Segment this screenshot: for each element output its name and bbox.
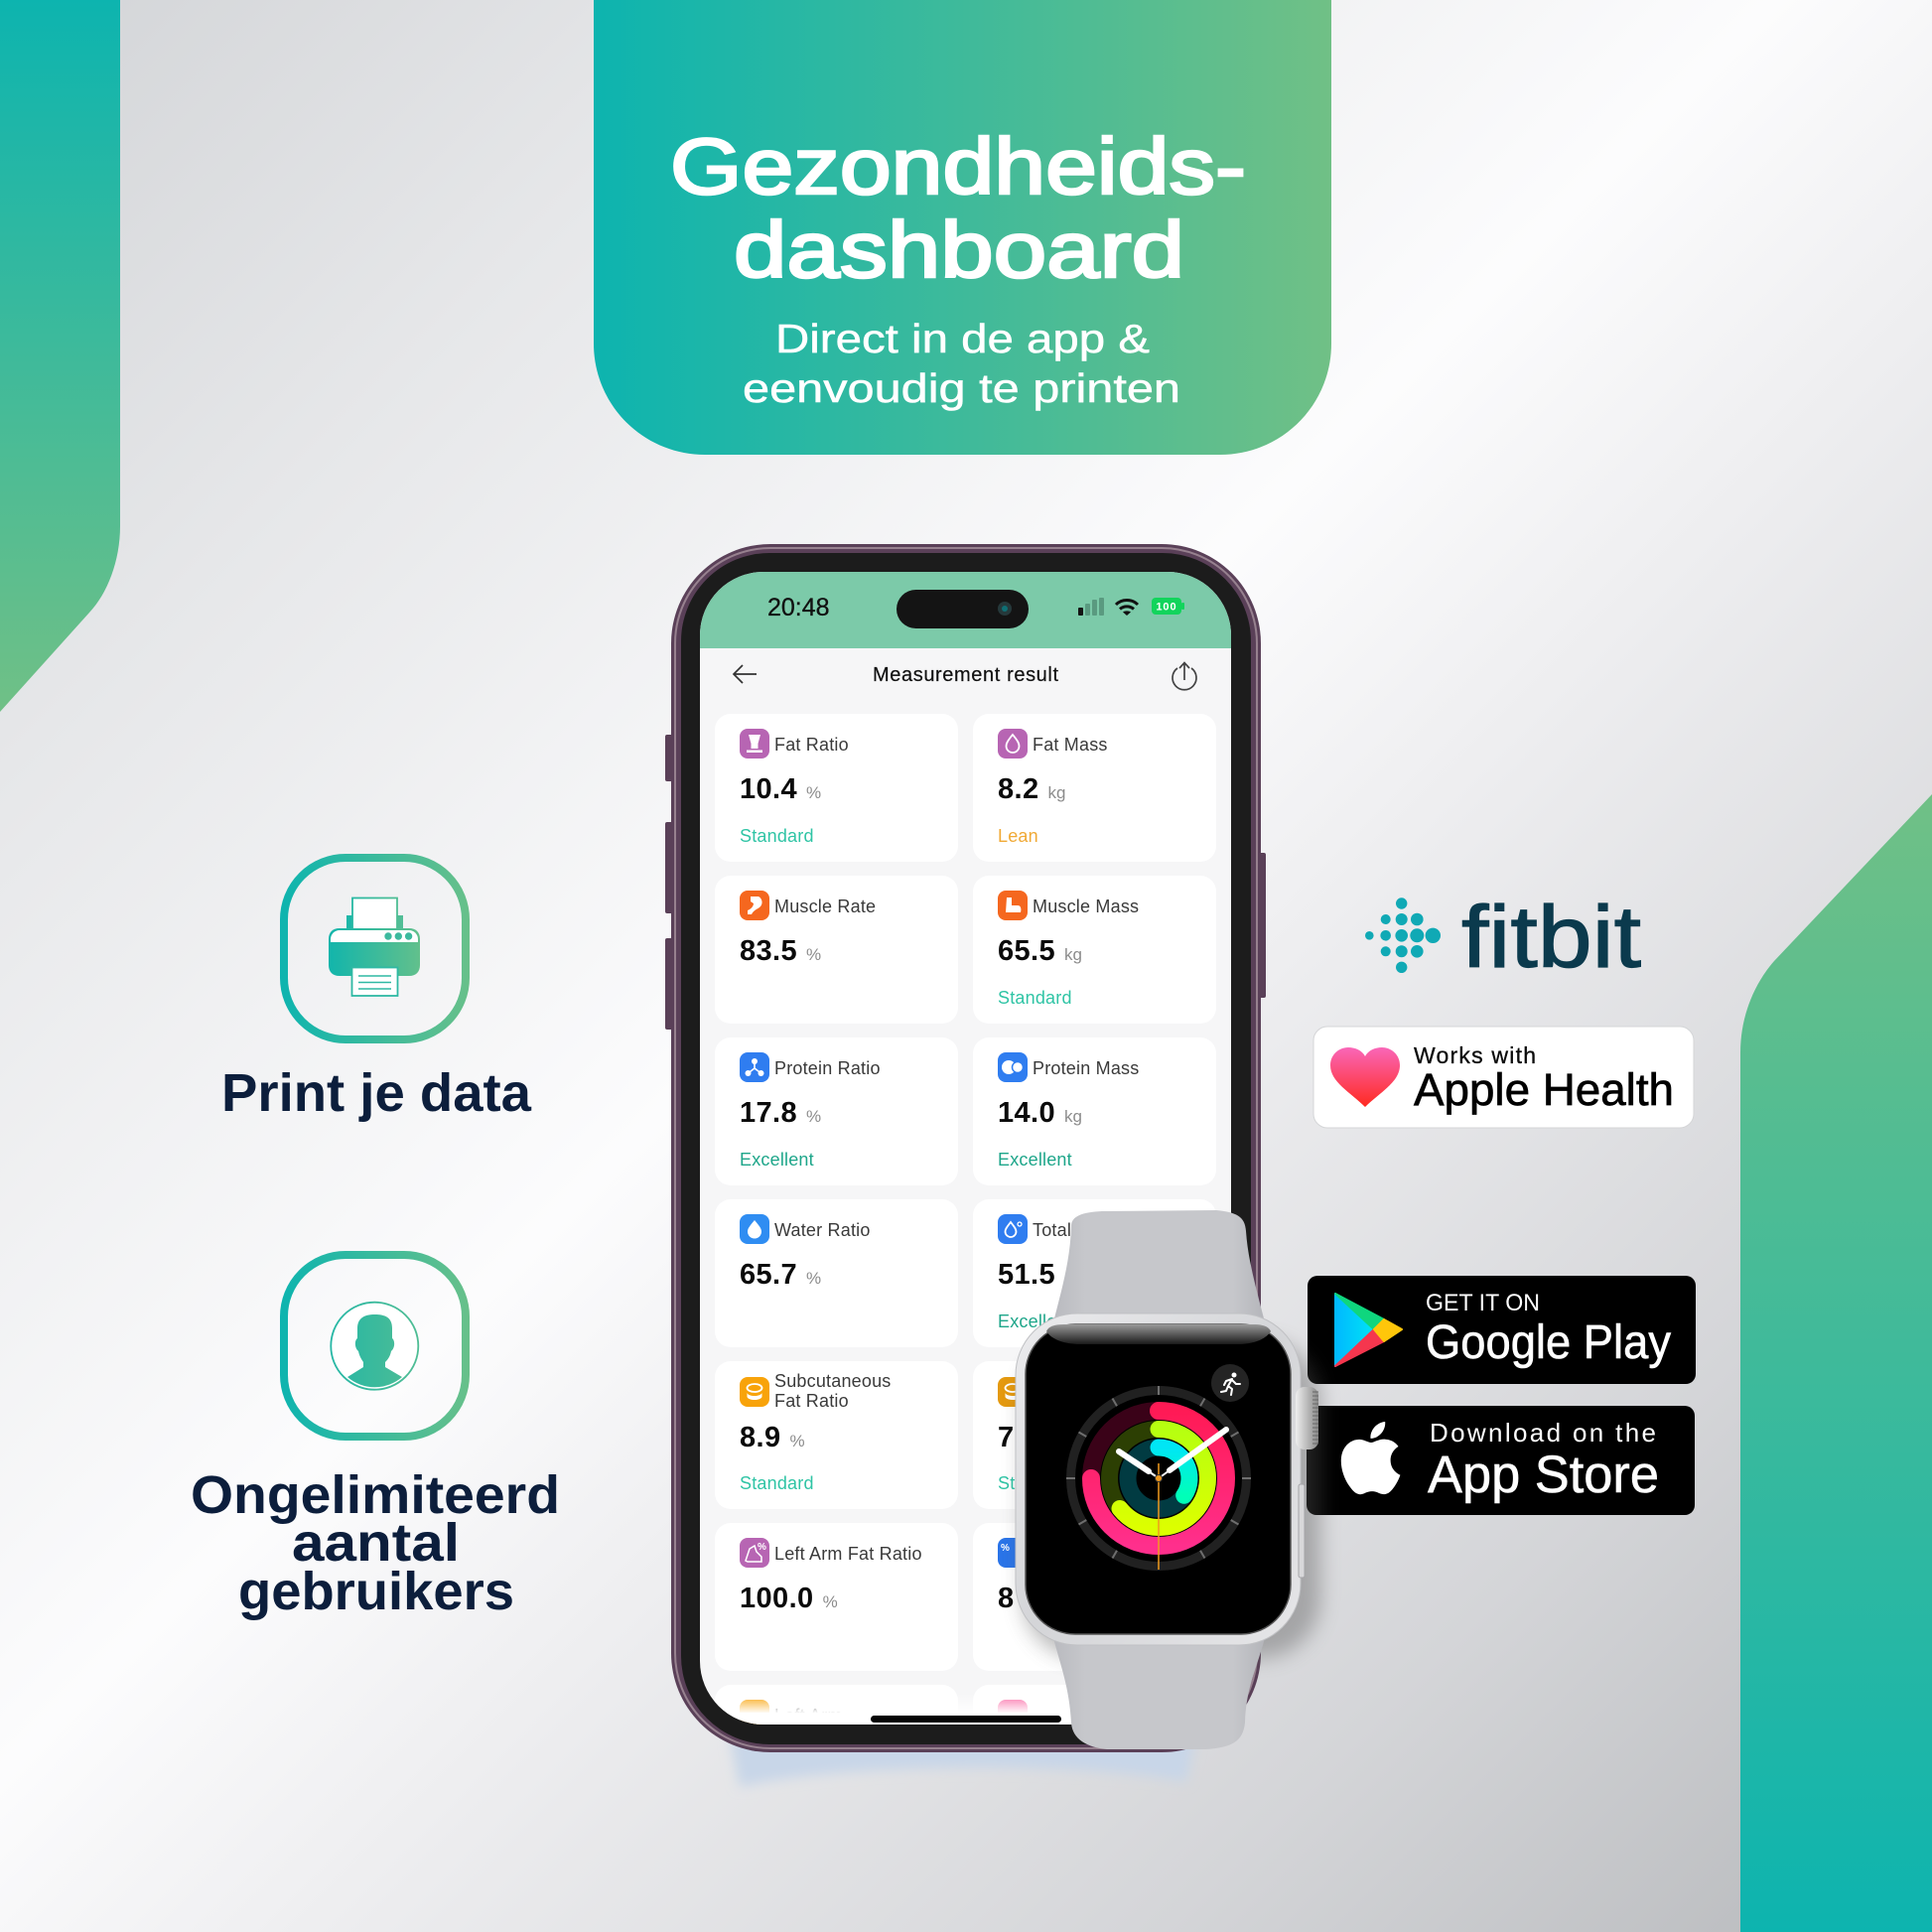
icon: Apple logo (1341, 1422, 1400, 1494)
icon: printer in rounded square (284, 858, 466, 1039)
icon: Google Play triangle (1335, 1294, 1402, 1366)
card: Total: Total (1033, 1220, 1071, 1240)
icon: protein ratio (740, 1052, 769, 1082)
App Store badge: App Store (1428, 1446, 1659, 1504)
watch band top (1053, 1210, 1265, 1322)
label: Ongelimiteerd aantal gebruikers: aantal (292, 1513, 460, 1573)
app store badges (1307, 1276, 1696, 1515)
card: Protein Mass: Protein Mass (1033, 1058, 1139, 1078)
Google Play badge: GET IT ON (1426, 1290, 1540, 1316)
card: Muscle Rate: 83.5 % (740, 935, 821, 967)
card: Water Ratio: Water Ratio (774, 1220, 871, 1240)
card row: faded bottom cards: Left Arm (774, 1706, 843, 1725)
icon: water ratio (740, 1214, 769, 1244)
card: Subcutaneous Fat Ratio (715, 1361, 958, 1509)
phone side buttons (665, 735, 1266, 1030)
icon: right arm: % (1001, 1543, 1010, 1554)
activity dial (1066, 1386, 1251, 1570)
phone screen (700, 572, 1231, 1744)
logo: fitbit: fitbit (1461, 888, 1641, 986)
feature: unlimited users (191, 1255, 560, 1621)
card: Left Arm Fat Ratio: Left Arm Fat Ratio (774, 1544, 922, 1564)
card: Left Arm Fat Ratio (715, 1523, 958, 1671)
subtitle: Direct in de app & (775, 316, 1150, 361)
panel: title header (594, 0, 1331, 455)
back arrow (734, 665, 757, 683)
navigation bar (734, 663, 1196, 690)
subtitle (743, 316, 1180, 411)
icon: muscle mass (998, 891, 1028, 920)
signal bars (1078, 598, 1104, 616)
card: Fat Mass: Lean (998, 826, 1038, 846)
share icon (1173, 663, 1196, 690)
card: Protein Ratio: Protein Ratio (774, 1058, 881, 1078)
Google Play badge (1308, 1276, 1696, 1384)
card: subcutaneous fat mass: 7. (998, 1422, 1023, 1453)
status bar (700, 572, 1231, 648)
card row: faded bottom cards (715, 1685, 1216, 1744)
dynamic island (897, 590, 1029, 628)
card: Fat Mass (973, 714, 1216, 862)
label: Ongelimiteerd aantal gebruikers (191, 1465, 560, 1621)
phone frame (671, 544, 1261, 1752)
icon: protein mass (998, 1052, 1028, 1082)
card: Protein Ratio: Excellent (740, 1150, 814, 1170)
icon: subcutaneous fat ratio (740, 1377, 769, 1407)
icon: subcutaneous fat mass (998, 1377, 1028, 1407)
label: Ongelimiteerd aantal gebruikers: Ongelimiteerd (191, 1465, 560, 1525)
icon: muscle rate (740, 891, 769, 920)
card: Muscle Mass: Muscle Mass (1033, 897, 1139, 916)
dim ring tracks (1091, 1411, 1226, 1546)
card: Protein Mass: Excellent (998, 1150, 1072, 1170)
feature: print data (221, 858, 532, 1123)
icon: left arm fat ratio (740, 1538, 769, 1568)
icon: left arm fat ratio: % (758, 1542, 766, 1553)
panel: bottom-right corner shape (1740, 794, 1932, 1932)
exercise ring (1120, 1430, 1207, 1527)
card: Fat Mass: Fat Mass (1033, 735, 1108, 755)
card: Subcutaneous Fat Ratio: Fat Ratio (774, 1391, 849, 1411)
card: subcutaneous fat mass (973, 1361, 1216, 1509)
Apple Watch (1016, 1210, 1318, 1749)
icon: right arm (998, 1538, 1028, 1568)
logo: fitbit (1365, 888, 1641, 986)
label: Ongelimiteerd aantal gebruikers: gebruikers (238, 1562, 514, 1621)
title: dashboard (734, 206, 1184, 294)
icon: user in rounded square (284, 1255, 466, 1437)
status bar: 20:48 (767, 594, 830, 621)
App Store badge (1307, 1406, 1695, 1515)
hour and minute hands (1119, 1430, 1226, 1478)
card: Fat Mass: 8.2 kg (998, 773, 1065, 805)
phone bezel (681, 553, 1251, 1744)
App Store badge: Download on the (1430, 1418, 1656, 1448)
home indicator (871, 1716, 1061, 1723)
card: Subcutaneous Fat Ratio: 8.9 % (740, 1422, 805, 1453)
card: Muscle Mass (973, 876, 1216, 1024)
badge: Works with Apple Health (1313, 1027, 1694, 1128)
watch glare (1046, 1324, 1271, 1344)
icon: fat mass drop (998, 729, 1028, 759)
card: Fat Ratio: Standard (740, 826, 814, 846)
card: Protein Ratio: 17.8 % (740, 1097, 821, 1129)
title (670, 122, 1246, 294)
stand ring (1159, 1448, 1189, 1495)
watch crown (1296, 1387, 1318, 1449)
label: Print je data: Print je data (221, 1063, 532, 1123)
card: Muscle Rate (715, 876, 958, 1024)
move ring (1091, 1411, 1226, 1546)
icon: heart (1330, 1047, 1400, 1107)
card: Protein Mass (973, 1037, 1216, 1185)
running complication (1211, 1364, 1249, 1402)
card: Left Arm Fat Ratio: 100.0 % (740, 1583, 838, 1614)
phone (665, 544, 1266, 1752)
card: Subcutaneous Fat Ratio: Standard (740, 1473, 814, 1493)
icon: fat ratio (740, 729, 769, 759)
Google Play badge: Google Play (1426, 1316, 1671, 1369)
panel: top-left corner shape (0, 0, 120, 712)
badge: Works with Apple Health: Works with (1414, 1042, 1536, 1068)
watch side button (1299, 1484, 1305, 1578)
badge: Works with Apple Health: Apple Health (1414, 1064, 1674, 1115)
watch case (1016, 1313, 1301, 1645)
phone reflection (730, 1737, 1196, 1787)
wifi icon (1116, 600, 1138, 616)
watch shadow (1023, 1340, 1320, 1658)
second hand (1158, 1463, 1160, 1570)
card: Water Ratio: 65.7 % (740, 1259, 821, 1291)
card: Fat Ratio: 10.4 % (740, 773, 821, 805)
card: Muscle Rate: Muscle Rate (774, 897, 876, 916)
card: Fat Ratio (715, 714, 958, 862)
card: Muscle Mass: Standard (998, 988, 1072, 1008)
card: right arm (973, 1523, 1216, 1671)
card: Total: 51.5 (998, 1259, 1055, 1291)
icon: total water (998, 1214, 1028, 1244)
card: Subcutaneous Fat Ratio: Subcutaneous (774, 1371, 892, 1391)
watch band bottom (1053, 1638, 1265, 1749)
card: Water Ratio (715, 1199, 958, 1347)
card: subcutaneous fat mass: St (998, 1473, 1015, 1493)
card: Protein Ratio (715, 1037, 958, 1185)
fitbit dots (1365, 897, 1441, 973)
subtitle: eenvoudig te printen (743, 365, 1180, 411)
battery: 100 (1156, 602, 1177, 614)
card: Total: Excellent (998, 1311, 1072, 1331)
battery (1152, 598, 1184, 615)
navigation bar: Measurement result (873, 664, 1058, 686)
watch screen (1026, 1324, 1291, 1634)
card: Total (973, 1199, 1216, 1347)
card: Muscle Mass: 65.5 kg (998, 935, 1082, 967)
title: Gezondheids- (670, 122, 1246, 210)
dial tick ring (1070, 1390, 1247, 1567)
card: Protein Mass: 14.0 kg (998, 1097, 1082, 1129)
card: Fat Ratio: Fat Ratio (774, 735, 849, 755)
card: right arm: 8 (998, 1583, 1015, 1614)
